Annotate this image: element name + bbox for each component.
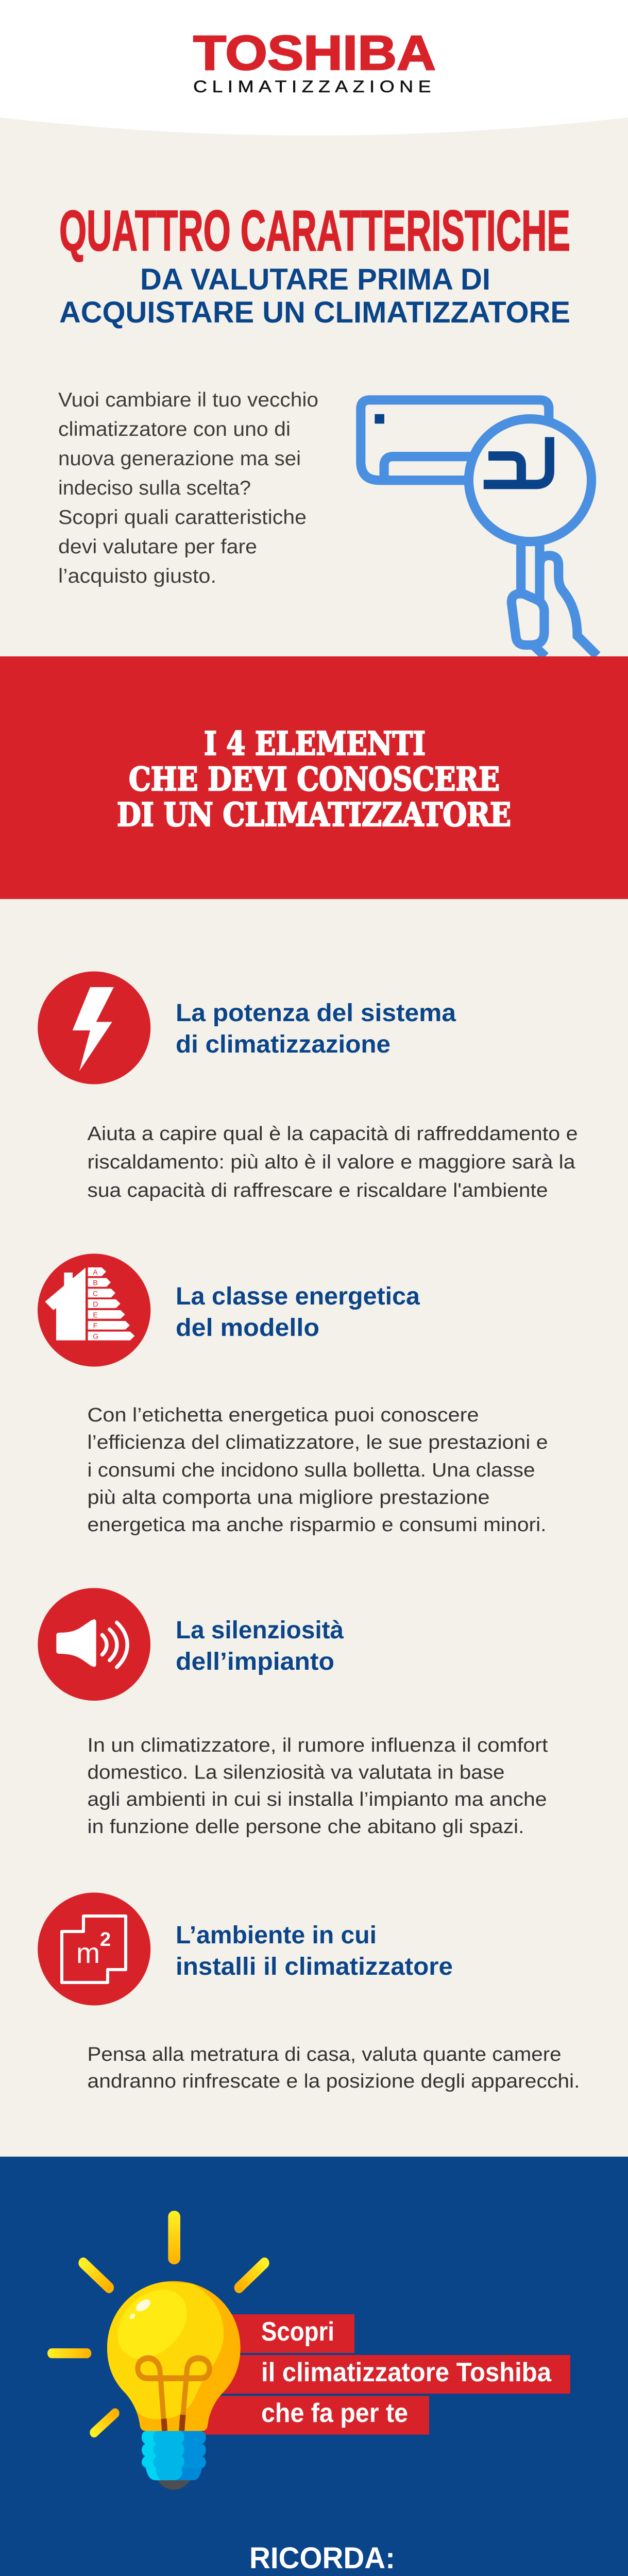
text: silenziosita: domestico. La silenziosità va valutata in base [88,1762,504,1784]
title [59,199,570,329]
heading: potenza: La potenza del sistema [176,999,456,1027]
icon: energy label house: F [93,1321,97,1330]
icon: energy label house [38,1253,150,1367]
text: ambiente [88,2044,580,2092]
panel: silenziosita [38,1588,548,1838]
red callout bars: Scopri [261,2317,334,2347]
heading: potenza: di climatizzazione [176,1031,391,1058]
panel: ambiente [38,1893,580,2092]
intro text: Scopri quali caratteristiche [58,506,307,529]
heading: classe energetica: del modello [176,1314,319,1342]
icon: floor plan m2 [38,1893,150,2005]
text: classe energetica: l’efficienza del climatizzatore, le sue prestazioni e [88,1432,548,1453]
panel: red banner [0,656,628,899]
text: silenziosita: agli ambienti in cui si installa l’impianto ma anche [88,1789,547,1810]
red callout bars: che fa per te [261,2398,408,2428]
text: potenza [88,1123,578,1201]
title: ACQUISTARE UN CLIMATIZZATORE [59,296,570,329]
text: classe energetica: energetica ma anche risparmio e consumi minori. [88,1514,546,1536]
heading: silenziosita: La silenziosità [176,1617,344,1644]
icon: energy label house: A [93,1268,98,1276]
intro text: indeciso sulla scelta? [58,477,251,499]
icon: air conditioner under magnifying glass [356,395,601,656]
panel: potenza del sistema [38,972,578,1201]
heading: silenziosita [176,1617,344,1675]
icon: energy label house: B [93,1279,98,1287]
text: silenziosita: in funzione delle persone che abitano gli spazi. [88,1816,524,1838]
heading: classe energetica: La classe energetica [176,1283,420,1310]
icon: energy label house: D [93,1300,98,1308]
text: ambiente: Pensa alla metratura di casa, valuta quante camere [88,2044,562,2065]
intro text: l’acquisto giusto. [58,565,216,587]
text: classe energetica: Con l’etichetta energetica puoi conoscere [88,1404,479,1426]
intro text: Vuoi cambiare il tuo vecchio [58,389,318,411]
text: silenziosita: In un climatizzatore, il rumore influenza il comfort [88,1735,548,1756]
text: classe energetica: i consumi che incidono sulla bolletta. Una classe [88,1460,535,1481]
intro text: nuova generazione ma sei [58,448,301,470]
heading: ambiente: installi il climatizzatore [176,1953,453,1980]
text: potenza: sua capacità di raffrescare e riscaldare l'ambiente [88,1180,548,1201]
title: DA VALUTARE PRIMA DI [140,263,490,296]
logo: Toshiba: TOSHIBA [193,26,436,80]
icon: lightning bolt [38,972,150,1084]
intro text [58,389,318,587]
icon: floor plan m2: 2 [100,1929,111,1951]
icon: energy label house: C [93,1289,98,1297]
panel: blue call to action [0,2157,628,2576]
red callout bars [203,2314,570,2435]
text: ambiente: andranno rinfrescate e la posizione degli apparecchi. [88,2071,580,2092]
banner heading: I 4 ELEMENTI [204,724,426,762]
banner heading: DI UN CLIMATIZZATORE [117,795,511,834]
banner heading: CHE DEVI CONOSCERE [129,760,500,798]
banner heading [117,724,511,834]
heading: ambiente [176,1922,453,1980]
text: classe energetica: più alta comporta una migliore prestazione [88,1487,489,1509]
header: logo panel [0,0,628,135]
intro text: devi valutare per fare [58,536,257,558]
icon: energy label house: E [93,1311,98,1319]
heading: silenziosita: dell’impianto [176,1648,334,1675]
icon: light bulb [47,2211,269,2489]
text: potenza: riscaldamento: più alto è il valore e maggiore sarà la [88,1151,575,1173]
icon: energy label house: G [93,1332,98,1340]
panel: classe energetica [38,1253,548,1536]
text: potenza: Aiuta a capire qual è la capacità di raffreddamento e [88,1123,578,1145]
heading: classe energetica [176,1283,420,1342]
heading: potenza [176,999,456,1058]
ricorda heading: RICORDA: [249,2541,395,2575]
icon: floor plan m2: m [76,1937,100,1969]
text: silenziosita [88,1735,548,1838]
red callout bars: il climatizzatore Toshiba [261,2358,552,2387]
logo subtitle: CLIMATIZZAZIONE [193,77,436,96]
heading: ambiente: L’ambiente in cui [176,1922,377,1949]
icon: speaker [38,1588,150,1701]
intro text: climatizzatore con uno di [58,418,291,440]
text: classe energetica [88,1404,548,1536]
